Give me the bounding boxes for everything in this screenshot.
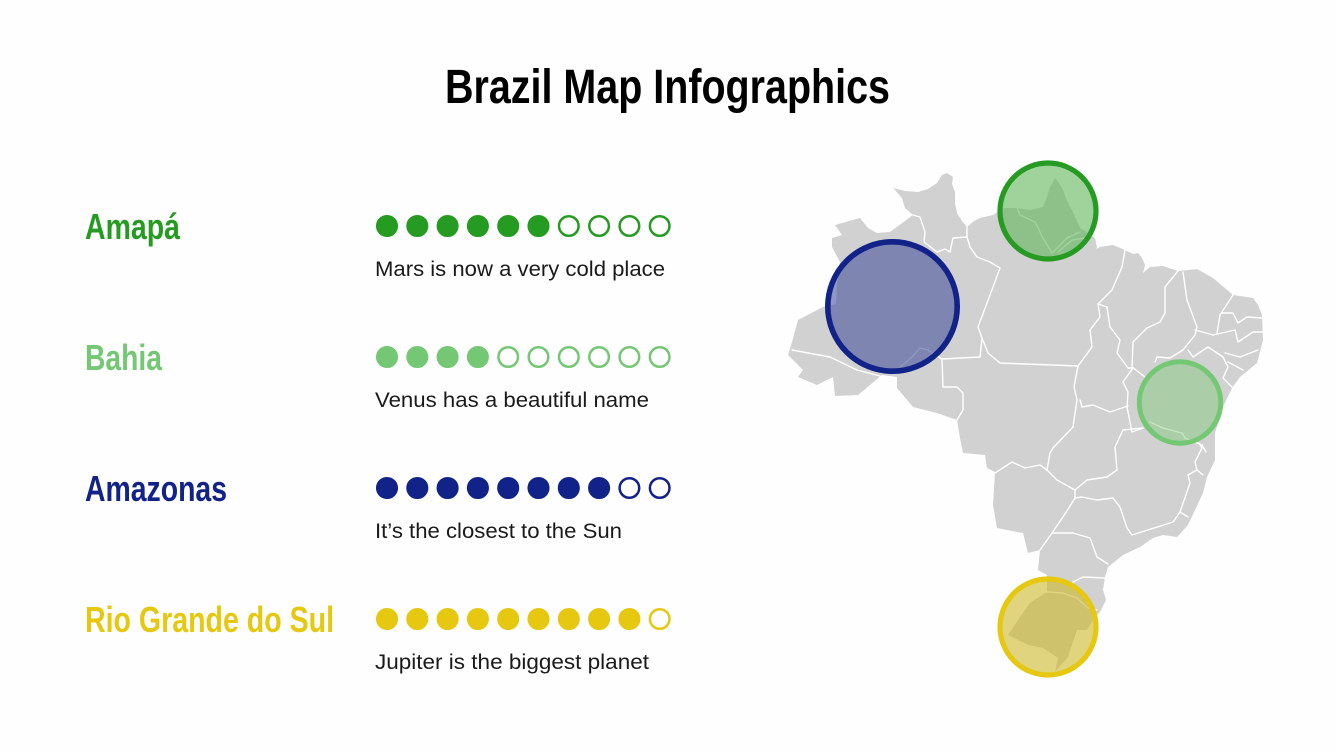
rating dots: 9 of 10 [377, 609, 670, 629]
row: Amapá [85, 206, 670, 281]
heading: Bahia: Bahia [85, 337, 163, 378]
description: It’s the closest to the Sun [375, 520, 622, 543]
description: Mars is now a very cold place [375, 258, 665, 281]
description: Jupiter is the biggest planet [375, 651, 649, 674]
row: Rio Grande do Sul [85, 599, 670, 674]
row: Bahia [85, 337, 670, 412]
marker: Amazonas [828, 242, 957, 371]
marker: Amapá [1000, 163, 1096, 259]
marker: Bahia [1139, 362, 1221, 443]
marker: Rio Grande do Sul [1000, 579, 1096, 675]
heading: Amazonas: Amazonas [85, 468, 227, 509]
country shape [788, 173, 1263, 672]
row: Amazonas [85, 468, 670, 543]
rating dots: 6 of 10 [377, 216, 670, 236]
heading: Amapá: Amapá [85, 206, 181, 247]
description: Venus has a beautiful name [375, 389, 649, 412]
state borders [792, 208, 1263, 610]
heading: Rio Grande do Sul: Rio Grande do Sul [85, 599, 334, 640]
map of Brazil [788, 173, 1263, 672]
rating dots: 4 of 10 [377, 347, 670, 367]
rating dots: 8 of 10 [377, 478, 670, 498]
title: Brazil Map Infographics [445, 61, 890, 114]
